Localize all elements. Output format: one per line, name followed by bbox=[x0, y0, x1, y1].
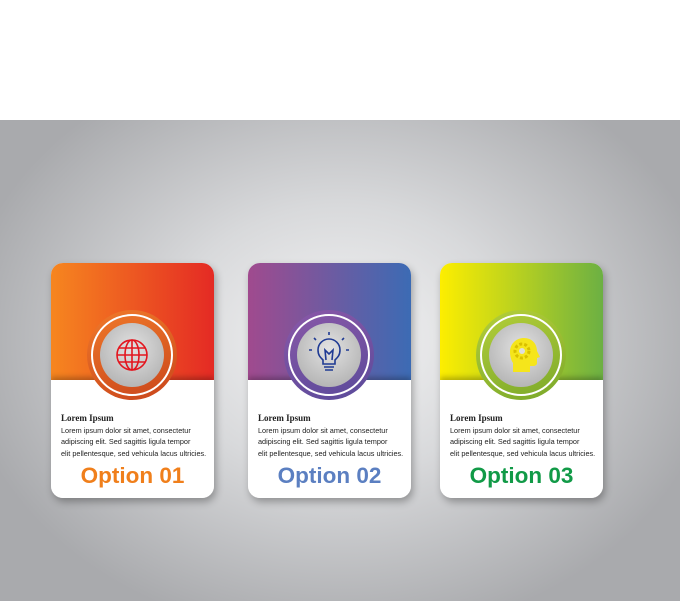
card: option 01 bbox=[51, 263, 214, 498]
text block: Lorem Ipsum bbox=[61, 413, 114, 423]
text block: elit pellentesque, sed vehicula lacus ultricies. bbox=[61, 448, 206, 458]
text block: Lorem ipsum dolor sit amet, consectetur bbox=[61, 426, 191, 434]
text block: Lorem Ipsum bbox=[450, 413, 503, 423]
icon: head with gear bbox=[476, 310, 566, 400]
icon: bulb bbox=[284, 310, 374, 400]
heading: option 01: Option 01 bbox=[81, 463, 184, 488]
text block bbox=[258, 413, 403, 458]
heading: option 03: Option 03 bbox=[470, 463, 573, 488]
text block bbox=[61, 413, 206, 458]
text block bbox=[450, 413, 595, 458]
text block: Lorem ipsum dolor sit amet, consectetur bbox=[450, 426, 580, 434]
text block: Lorem ipsum dolor sit amet, consectetur bbox=[258, 426, 388, 434]
text block: adipiscing elit. Sed sagittis ligula tempor bbox=[450, 437, 579, 446]
text block: adipiscing elit. Sed sagittis ligula tempor bbox=[61, 437, 190, 446]
heading: option 02: Option 02 bbox=[278, 463, 381, 488]
text block: Lorem Ipsum bbox=[258, 413, 311, 423]
icon: globe bbox=[87, 310, 177, 400]
card: option 03 bbox=[440, 263, 603, 498]
text block: adipiscing elit. Sed sagittis ligula tempor bbox=[258, 437, 387, 446]
card: option 02 bbox=[248, 263, 411, 498]
text block: elit pellentesque, sed vehicula lacus ultricies. bbox=[258, 448, 403, 458]
text block: elit pellentesque, sed vehicula lacus ultricies. bbox=[450, 448, 595, 458]
